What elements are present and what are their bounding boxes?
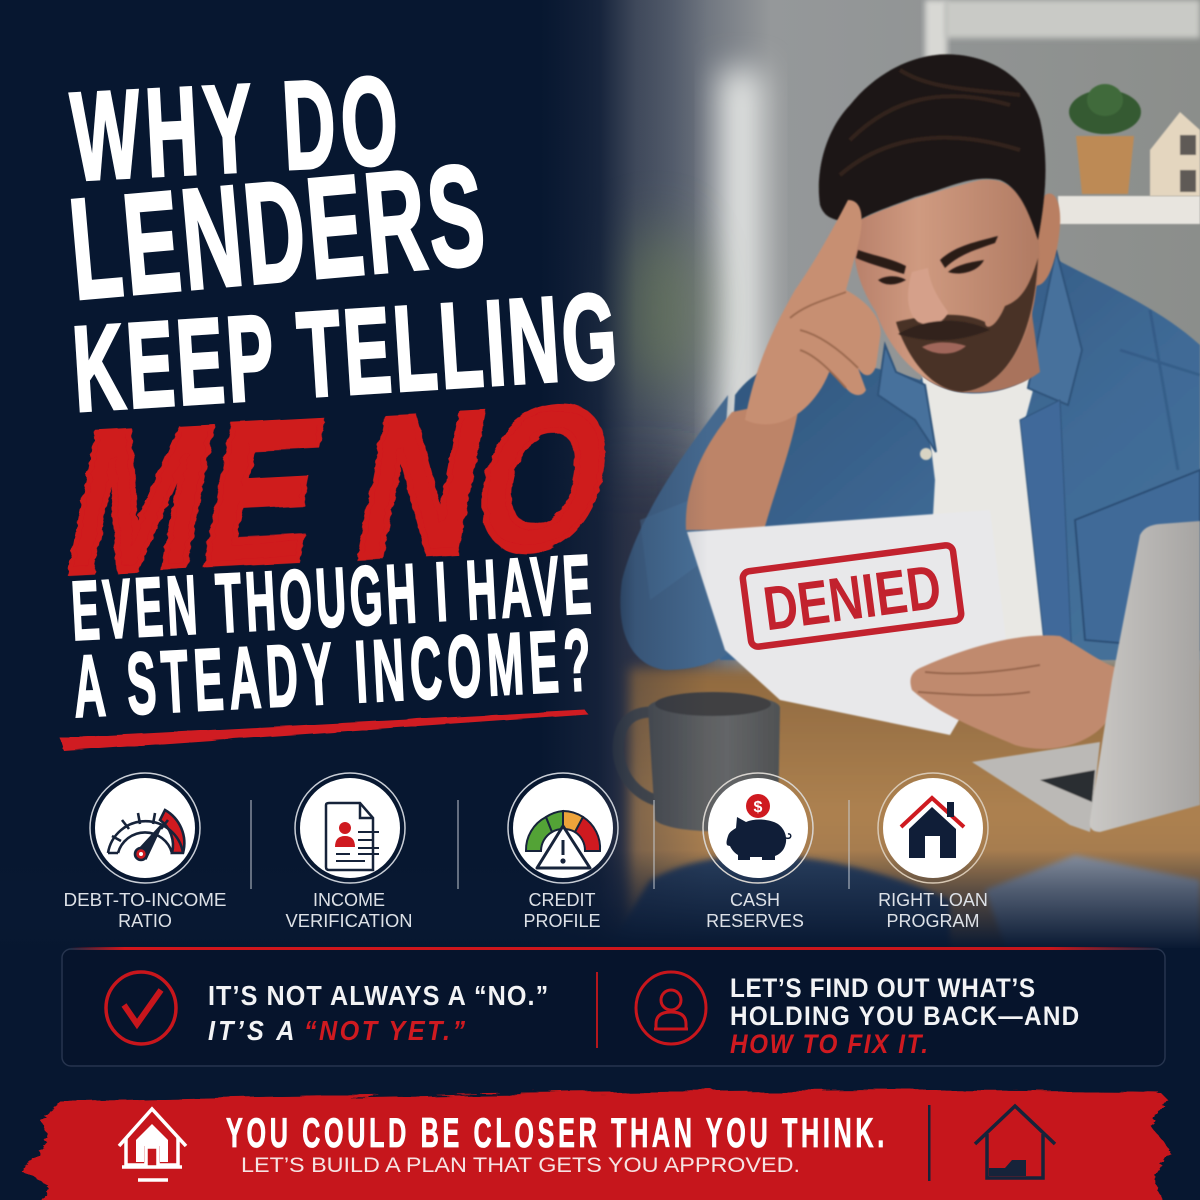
facial features [856, 236, 998, 354]
shelves [925, 0, 1200, 224]
icon: navy house outline [975, 1106, 1055, 1178]
title: WHY DO [68, 51, 401, 207]
text: what's holding you back: LET’S FIND OUT WHAT’S [730, 974, 1035, 1003]
factor: cash reserves: RESERVES [706, 911, 804, 931]
factor: credit profile: PROFILE [523, 911, 601, 931]
banner: call to action [22, 1090, 1170, 1200]
white t-shirt [922, 372, 1050, 660]
text: plan that gets you approved: LET’S BUILD A PLAN THAT GETS YOU APPROVED. [241, 1154, 800, 1177]
factor: cash reserves: CASH [730, 890, 780, 910]
hand holding paper [910, 635, 1118, 749]
text: closer than you think: YOU COULD BE CLOSER THAN YOU THINK. [226, 1111, 884, 1157]
lower backdrop [0, 948, 1200, 1200]
text: what's holding you back: HOW TO FIX IT. [730, 1030, 928, 1059]
icon: credit meter with warning [526, 811, 600, 868]
text: not always a no: IT’S A [208, 1015, 294, 1046]
face [854, 180, 1039, 392]
table [628, 668, 1200, 958]
title: KEEP TELLING [69, 267, 621, 437]
title: LENDERS [64, 134, 490, 329]
factor: income verification: VERIFICATION [286, 911, 412, 931]
denied stamp: DENIED [760, 553, 945, 644]
text: what's holding you back [730, 974, 1079, 1059]
photo: worried man holding denied letter [540, 0, 1200, 960]
icon: gauge [108, 810, 184, 860]
subtitle [69, 538, 593, 736]
factor: cash reserves [703, 773, 813, 931]
factor: debt-to-income ratio: RATIO [118, 911, 172, 931]
subtitle: A STEADY INCOME? [71, 610, 593, 736]
icon: house with red roof [901, 798, 964, 858]
icon: document with person [326, 803, 379, 870]
collar and placket [878, 250, 1082, 660]
panel: not yet message [62, 947, 1165, 1066]
factor: right loan program: RIGHT LOAN [878, 890, 988, 910]
red brush underline [60, 710, 588, 751]
factor: income verification [286, 773, 412, 931]
dividers between icons [251, 800, 849, 889]
laptop [972, 521, 1200, 832]
hair [819, 54, 1046, 240]
factor: credit profile: CREDIT [528, 890, 596, 910]
text: not always a no: IT’S NOT ALWAYS A “NO.” [208, 980, 548, 1011]
title [64, 51, 621, 437]
title: me no brush text: ME NO [52, 363, 629, 615]
icon: person in circle [636, 972, 706, 1044]
coffee mug [618, 692, 780, 831]
subtitle: EVEN THOUGH I HAVE [69, 538, 593, 659]
bottom fade overlay [0, 850, 1200, 950]
icon: piggy bank with coin [727, 794, 791, 860]
text: not always a no [208, 980, 548, 1046]
arm and hand at forehead [686, 200, 881, 530]
icon: piggy bank with coin: $ [754, 799, 763, 816]
factor: income verification: INCOME [313, 890, 385, 910]
neck [922, 300, 1040, 393]
beard [896, 258, 1038, 392]
papers on table [600, 855, 1200, 960]
room backdrop [540, 0, 1200, 950]
ear [1034, 193, 1060, 285]
paper [687, 510, 1006, 735]
factor: right loan program: PROGRAM [886, 911, 980, 931]
icon: white home [119, 1109, 186, 1180]
shirt back and sleeve [620, 250, 1200, 670]
factor: debt-to-income ratio: DEBT-TO-INCOME [64, 890, 226, 910]
factor: credit profile [508, 773, 618, 931]
shelf plant and model house [1069, 84, 1200, 196]
icon: check in circle [106, 972, 176, 1044]
text: not always a no: “NOT YET.” [304, 1015, 466, 1046]
factor: debt-to-income ratio [64, 773, 226, 931]
text: what's holding you back: HOLDING YOU BACK—AND [730, 1002, 1079, 1031]
factor: right loan program [878, 773, 988, 931]
